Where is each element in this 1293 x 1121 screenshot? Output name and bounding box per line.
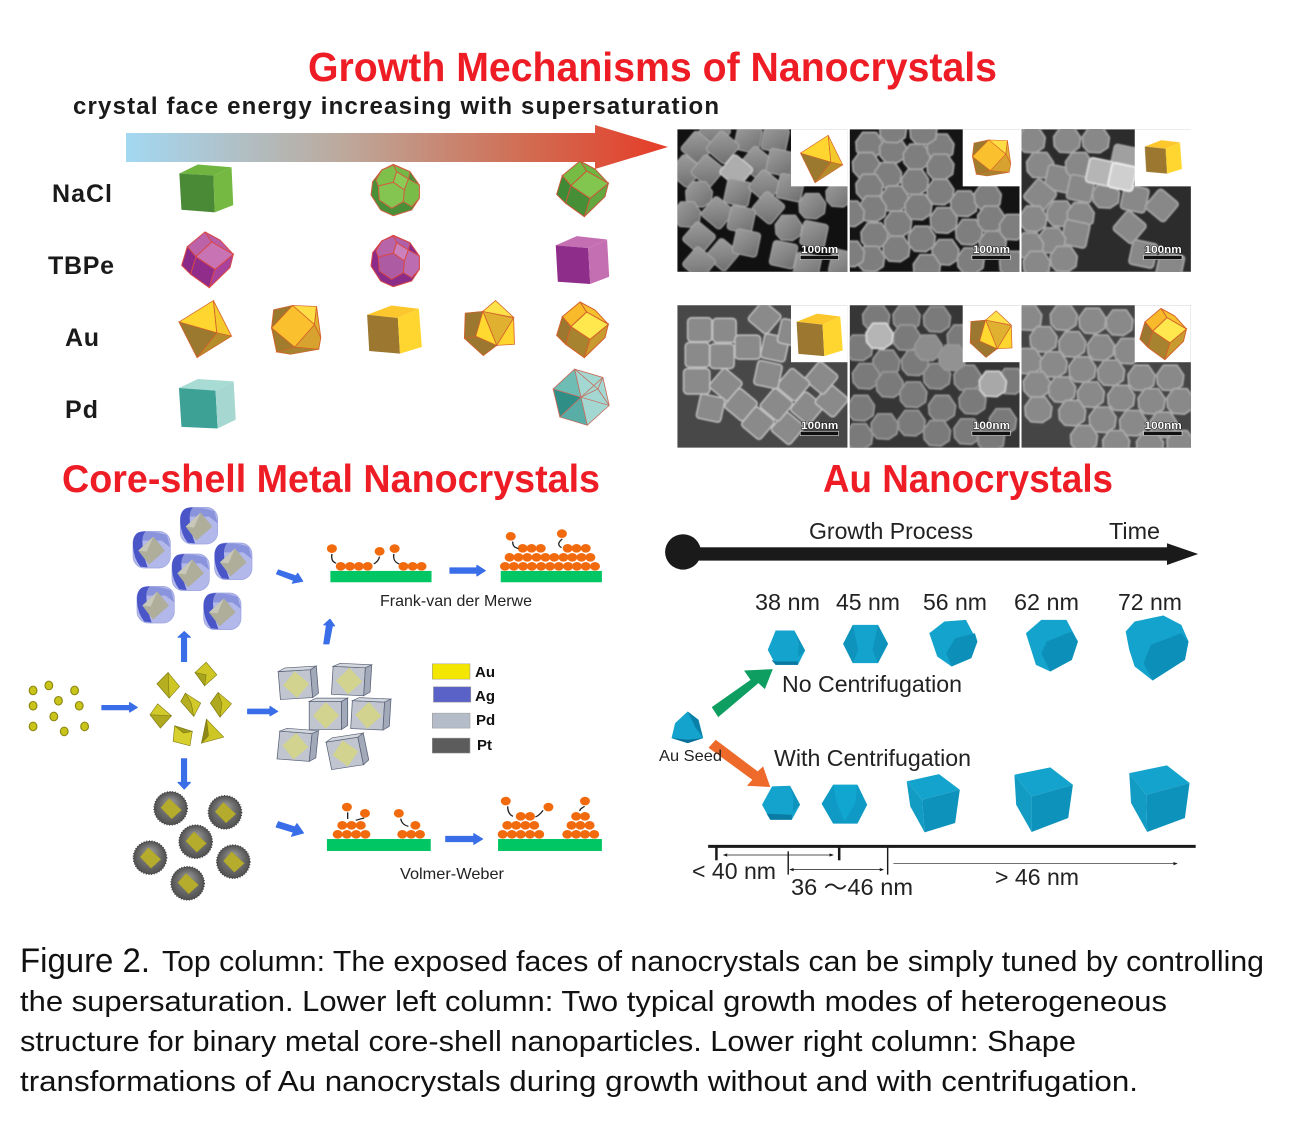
row label: Au: Au <box>65 324 99 352</box>
caption <box>20 942 1264 1098</box>
SEM panel 5: twinned particles <box>846 305 1025 451</box>
crystal: 62 nm <box>1026 620 1078 672</box>
crystal: cube 3 <box>1129 765 1190 832</box>
crystal: TBPe rhombic <box>182 232 233 288</box>
size scale axis <box>708 846 1196 875</box>
SEM panel 2: truncated octahedra <box>850 129 1020 272</box>
green arrow: no centrifugation <box>712 669 773 717</box>
crystal: Au cube <box>367 305 422 354</box>
SEM image grid <box>668 115 1194 458</box>
crystal: 45 nm <box>843 625 888 663</box>
timeline arrow <box>665 534 1198 570</box>
Pd-coated cubes <box>277 663 391 770</box>
heading: Au nanocrystals: Au Nanocrystals <box>823 458 1113 501</box>
scale bars: 100nm <box>801 420 838 432</box>
adatoms: Volmer-Weber <box>333 797 599 839</box>
inset: truncated model <box>963 129 1019 186</box>
mode label: Frank-van der Merwe: Frank-van der Merwe <box>380 593 532 610</box>
size label 72 nm: 72 nm <box>1118 589 1182 615</box>
row label: TBPe: TBPe <box>48 252 114 280</box>
SEM panel 6: rhombic particles lattice <box>1022 305 1191 448</box>
label: No Centrifugation: No Centrifugation <box>782 671 962 697</box>
seed crystal <box>672 711 703 743</box>
substrates <box>327 571 602 851</box>
scale bars: 100nm <box>973 420 1010 432</box>
legend label: Pt: Pt <box>477 737 492 754</box>
scale bars: 100nm <box>1145 420 1182 432</box>
scale bars <box>800 244 1182 435</box>
orange arrow: with centrifugation <box>709 740 770 787</box>
inset: twinned model <box>963 305 1019 362</box>
Au octahedra <box>150 662 232 746</box>
SEM panel 3: rounded particles <box>1016 127 1191 280</box>
legend label: Pd: Pd <box>476 712 495 729</box>
arrow label: crystal face energy increasing with supersaturation <box>73 93 719 120</box>
caption line 1: Top column: The exposed faces of nanocrystals can be simply tuned by controlling <box>162 946 1264 978</box>
crystal: cube 1 <box>907 774 960 832</box>
crystal: Au rhombic dodecahedron <box>557 302 608 358</box>
size label 38 nm: 38 nm <box>755 589 820 615</box>
inset: large cube model <box>791 305 847 362</box>
size label 62 nm: 62 nm <box>1014 589 1079 615</box>
crystal: Au twinned <box>464 301 514 356</box>
crystal: 56 nm <box>929 620 977 667</box>
heading: core-shell: Core-shell Metal Nanocrystals <box>62 458 600 501</box>
scale bars: 100nm <box>1145 244 1182 256</box>
scale label: over 46 nm: > 46 nm <box>995 864 1079 890</box>
size label 45 nm: 45 nm <box>836 589 900 615</box>
label: With Centrifugation: With Centrifugation <box>774 745 971 771</box>
crystal: NaCl truncated <box>371 164 419 216</box>
scale label: under 40 nm: < 40 nm <box>692 858 776 884</box>
Au growth diagram <box>665 534 1198 875</box>
legend label: Ag: Ag <box>475 688 495 705</box>
inset: octahedron model <box>791 129 847 186</box>
row label: NaCl: NaCl <box>52 180 112 208</box>
caption line 3: structure for binary metal core-shell nanoparticles. Lower right column: Shape <box>20 1026 1076 1058</box>
mode label: Volmer-Weber: Volmer-Weber <box>400 866 505 883</box>
crystal: lower truncated 2 <box>822 785 867 824</box>
legend swatches <box>432 664 471 753</box>
crystal: 72 nm <box>1126 616 1188 680</box>
small black deposition arrows <box>332 539 585 826</box>
label: Time: Time <box>1109 518 1160 544</box>
scale label: 36 to 46 nm: 36 ～46 nm <box>791 874 913 900</box>
title: Growth Mechanisms of Nanocrystals <box>308 44 997 90</box>
crystal: NaCl cube <box>179 165 233 212</box>
caption line 2: the supersaturation. Lower left column: Two typical growth modes of heterogeneous <box>20 986 1167 1018</box>
inset: rhombic model <box>1135 305 1191 362</box>
crystal: 38 nm <box>768 631 805 665</box>
scale bars: 100nm <box>973 244 1010 256</box>
Pt-coated particles <box>133 792 250 900</box>
gradient arrow: supersaturation <box>126 125 668 169</box>
crystal: Pd icosahedron <box>553 369 609 425</box>
crystal: NaCl rhombic <box>557 161 608 217</box>
crystal: TBPe cube <box>556 236 609 284</box>
crystal: Au truncated octahedron <box>272 305 321 354</box>
label: Growth Process: Growth Process <box>809 518 973 544</box>
adatoms: Frank-van der Merwe <box>327 529 600 571</box>
crystal: Au octahedron <box>179 301 232 358</box>
core-shell growth diagram <box>29 529 602 851</box>
crystal shape grid <box>179 161 609 429</box>
size label 56 nm: 56 nm <box>923 589 987 615</box>
caption line 4: transformations of Au nanocrystals during growth without and with centrifugation. <box>20 1066 1138 1098</box>
caption figure label: Figure 2. <box>20 942 150 980</box>
blue arrows <box>102 565 485 844</box>
legend label: Au: Au <box>475 664 495 681</box>
Au seeds <box>29 681 88 736</box>
SEM panel 1: octahedra <box>677 129 848 272</box>
scale bars: 100nm <box>801 244 838 256</box>
label: Au Seed: Au Seed <box>659 748 722 765</box>
Ag-coated particles <box>133 507 252 630</box>
row label: Pd: Pd <box>65 396 98 424</box>
inset: cube model <box>1135 129 1191 186</box>
crystal: TBPe truncated <box>371 235 419 287</box>
SEM panel 4: nanocubes <box>677 300 849 448</box>
crystal: Pd cube <box>179 379 236 429</box>
crystal: lower truncated 1 <box>762 786 800 820</box>
crystal: cube 2 <box>1014 767 1073 832</box>
